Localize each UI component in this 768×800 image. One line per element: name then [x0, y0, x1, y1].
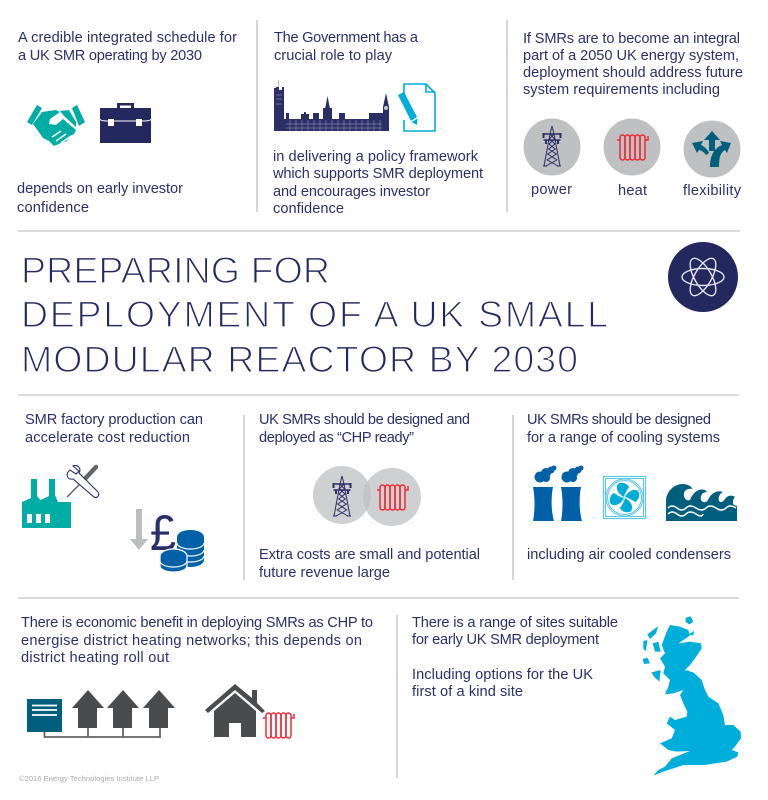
text: government heading: [274, 30, 419, 64]
text: system requirements heading: system requirements including: [523, 82, 720, 98]
text: factory heading: [25, 412, 203, 446]
text: government heading: crucial role to play: [274, 48, 393, 64]
text: investor confidence: [17, 181, 183, 216]
text: schedule heading: [18, 30, 237, 64]
text: cooling heading: for a range of cooling systems: [527, 430, 720, 446]
icon: briefcase: [100, 103, 151, 143]
text: schedule heading: a UK SMR operating by 2030: [18, 48, 202, 64]
text: policy framework: in delivering a policy framework: [273, 149, 479, 165]
icon: power: [524, 118, 580, 176]
text: sites heading: first of a kind site: [412, 684, 523, 700]
text: extra costs: [259, 547, 480, 581]
copyright: ©2016 Energy Technologies Institute LLP: [19, 774, 159, 783]
text: policy framework: confidence: [273, 201, 344, 217]
text: government heading: The Government has a: [274, 30, 419, 46]
text: system requirements heading: part of a 2050 UK energy system,: [523, 48, 739, 64]
panel: investor confidence: [17, 30, 237, 216]
icon: overlapping power and heat circles: [313, 466, 421, 526]
panel: factory production: [22, 412, 204, 573]
label: power: power: [531, 182, 572, 198]
icon: waves: [666, 484, 737, 521]
text: CHP heading: [259, 412, 470, 446]
panel: cooling systems: [527, 412, 737, 563]
text: extra costs: future revenue large: [259, 565, 390, 581]
title: MODULAR REACTOR BY 2030: [21, 338, 578, 380]
text: schedule heading: A credible integrated schedule for: [18, 30, 237, 46]
text: sites heading: There is a range of sites suitable: [412, 615, 618, 631]
title: [21, 249, 608, 380]
label: flexibility: flexibility: [683, 183, 742, 199]
panel: future system requirements: [523, 31, 743, 199]
text: factory heading: accelerate cost reduction: [25, 430, 190, 446]
icon: UK map: [643, 616, 741, 776]
icon: wrench and screwdriver: [67, 465, 99, 498]
text: air cooled condensers: including air cooled condensers: [527, 547, 731, 563]
icon: heat: [604, 118, 660, 176]
text: district heating heading: There is economic benefit in deploying SMRs as CHP to: [21, 615, 373, 631]
text: sites heading: [412, 615, 618, 700]
text: cooling heading: UK SMRs should be designed: [527, 412, 711, 428]
icon: Houses of Parliament: [274, 80, 389, 131]
title: PREPARING FOR: [21, 249, 330, 291]
text: investor confidence: depends on early investor: [17, 181, 183, 197]
panel: sites: [412, 615, 741, 776]
icon: radiator: [263, 713, 294, 738]
text: policy framework: and encourages investor: [273, 184, 430, 200]
icon: house: [205, 684, 265, 737]
text: CHP heading: deployed as “CHP ready”: [259, 430, 414, 446]
icon: document and pencil: [398, 84, 435, 131]
panel: district heating: [21, 615, 373, 738]
text: policy framework: which supports SMR deployment: [272, 166, 483, 182]
text: district heating heading: [21, 615, 373, 666]
text: CHP heading: UK SMRs should be designed and: [259, 412, 470, 428]
icon: factory: [22, 479, 71, 528]
title: DEPLOYMENT OF A UK SMALL: [21, 293, 608, 335]
panel: government role: [272, 30, 483, 217]
text: system requirements heading: deployment should address future: [523, 65, 743, 81]
text: sites heading: Including options for the UK: [412, 667, 593, 683]
text: system requirements heading: If SMRs are to become an integral: [523, 31, 740, 47]
text: district heating heading: energise district heating networks; this depends on: [21, 633, 362, 649]
icon: district heating network: [27, 690, 175, 737]
text: system requirements heading: [523, 31, 743, 98]
icon: cost reduction arrow: [130, 509, 148, 550]
icon: cooling towers: [533, 466, 584, 521]
panel: CHP ready: [259, 412, 480, 581]
icon: flexibility: [684, 120, 740, 178]
icon: atom: [668, 242, 738, 312]
icon: coin stacks: [160, 530, 204, 573]
icon: handshake: [27, 105, 85, 146]
text: district heating heading: district heating roll out: [21, 650, 169, 666]
text: cooling heading: [527, 412, 720, 446]
icon: air cooled condenser fan: [604, 476, 646, 518]
text: investor confidence: confidence: [17, 200, 89, 216]
label: heat: heat: [618, 183, 647, 199]
text: policy framework: [272, 149, 483, 217]
text: sites heading: for early UK SMR deployment: [412, 632, 599, 648]
text: extra costs: Extra costs are small and potential: [259, 547, 480, 563]
text: factory heading: SMR factory production can: [25, 412, 203, 428]
icon: pound sign: £: [150, 505, 176, 561]
